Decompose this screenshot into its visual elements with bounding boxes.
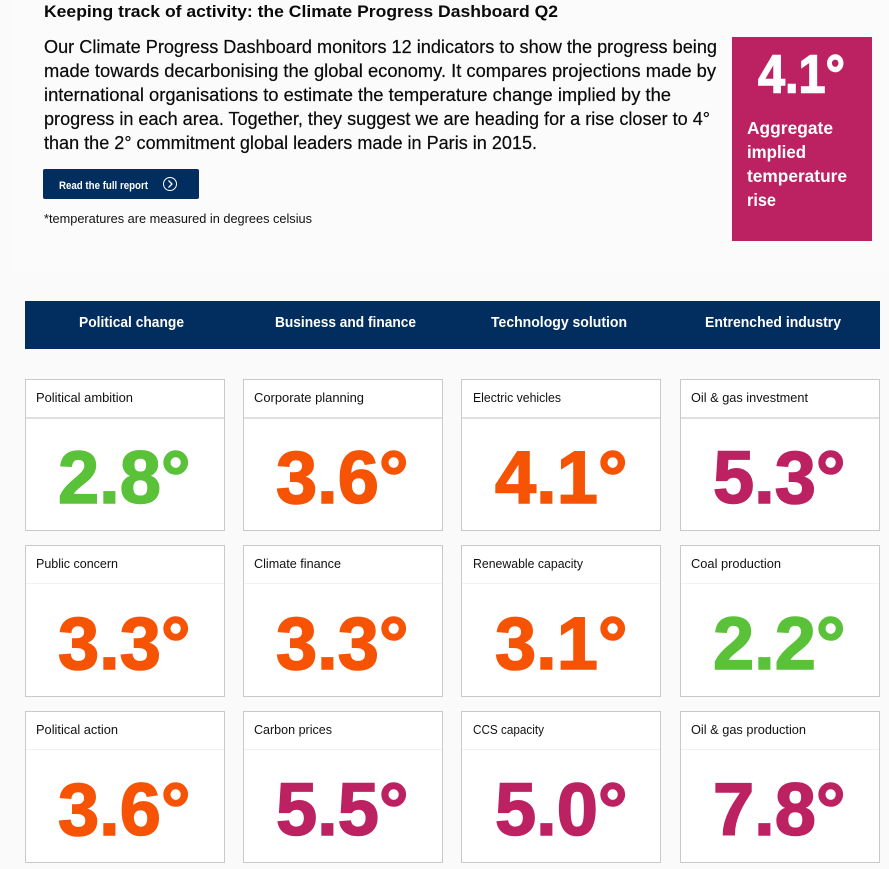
- footnote: *temperatures are measured in degrees celsius: [44, 212, 312, 226]
- card: renewable capacity: Renewable capacity: [473, 557, 584, 571]
- card: carbon prices: Carbon prices: [254, 723, 332, 737]
- card: ccs capacity: [462, 712, 660, 862]
- intro paragraph: than the 2° commitment global leaders made in Paris in 2015.: [44, 133, 537, 153]
- card: corporate planning: Corporate planning: [254, 391, 364, 405]
- card: electric vehicles: 4.1°: [495, 436, 627, 519]
- card: climate finance: Climate finance: [254, 557, 341, 571]
- card: oil and gas investment: Oil & gas investment: [691, 391, 809, 405]
- card: renewable capacity: [462, 546, 660, 696]
- intro paragraph: progress in each area. Together, they suggest we are heading for a rise closer to 4°: [44, 109, 710, 129]
- intro paragraph: Our Climate Progress Dashboard monitors 12 indicators to show the progress being: [44, 37, 717, 57]
- card: public concern: 3.3°: [58, 602, 190, 685]
- card: political ambition: 2.8°: [58, 436, 190, 519]
- card: public concern: [26, 546, 224, 696]
- aggregate label: implied: [747, 142, 806, 162]
- card: oil and gas production: Oil & gas production: [691, 723, 806, 737]
- category header bar: Entrenched industry: [705, 314, 842, 331]
- category header bar: Technology solution: [491, 314, 627, 331]
- category header bar: Political change: [79, 314, 184, 331]
- card: oil and gas production: [680, 712, 880, 862]
- card: coal production: 2.2°: [713, 602, 845, 685]
- card: political action: 3.6°: [58, 768, 190, 851]
- card: political ambition: [26, 380, 224, 530]
- aggregate value: 4.1°: [758, 44, 845, 104]
- title: Keeping track of activity: the Climate Progress Dashboard Q2: [44, 2, 558, 21]
- aggregate label: rise: [747, 190, 776, 210]
- aggregate label: temperature: [747, 166, 847, 186]
- card: corporate planning: [244, 380, 442, 530]
- button: read the full report: [43, 169, 199, 199]
- card: climate finance: 3.3°: [276, 602, 408, 685]
- card: ccs capacity: 5.0°: [495, 768, 627, 851]
- intro paragraph: made towards decarbonising the global economy. It compares projections made by: [44, 61, 716, 81]
- card: carbon prices: 5.5°: [276, 768, 408, 851]
- card: oil and gas investment: [680, 380, 880, 530]
- category header bar: [25, 301, 880, 349]
- card: coal production: [680, 546, 880, 696]
- aggregate label: Aggregate: [747, 118, 833, 138]
- card: carbon prices: [244, 712, 442, 862]
- card: public concern: Public concern: [36, 557, 118, 571]
- card: oil and gas production: 7.8°: [713, 768, 845, 851]
- button: read the full report: Read the full report: [59, 180, 148, 192]
- card: climate finance: [244, 546, 442, 696]
- card: electric vehicles: [462, 380, 660, 530]
- card: ccs capacity: CCS capacity: [473, 723, 545, 737]
- card: oil and gas investment: 5.3°: [713, 436, 845, 519]
- category header bar: Business and finance: [275, 314, 416, 331]
- aggregate label: [747, 118, 847, 210]
- card: political action: [26, 712, 224, 862]
- card: coal production: Coal production: [691, 557, 781, 571]
- card: political ambition: Political ambition: [36, 391, 133, 405]
- intro paragraph: [44, 37, 717, 153]
- card: corporate planning: 3.6°: [276, 436, 408, 519]
- card: political action: Political action: [36, 723, 118, 737]
- panel: aggregate temperature: [732, 37, 872, 241]
- intro paragraph: international organisations to estimate the temperature change implied by the: [44, 85, 671, 105]
- card: electric vehicles: Electric vehicles: [473, 391, 561, 405]
- card: renewable capacity: 3.1°: [495, 602, 627, 685]
